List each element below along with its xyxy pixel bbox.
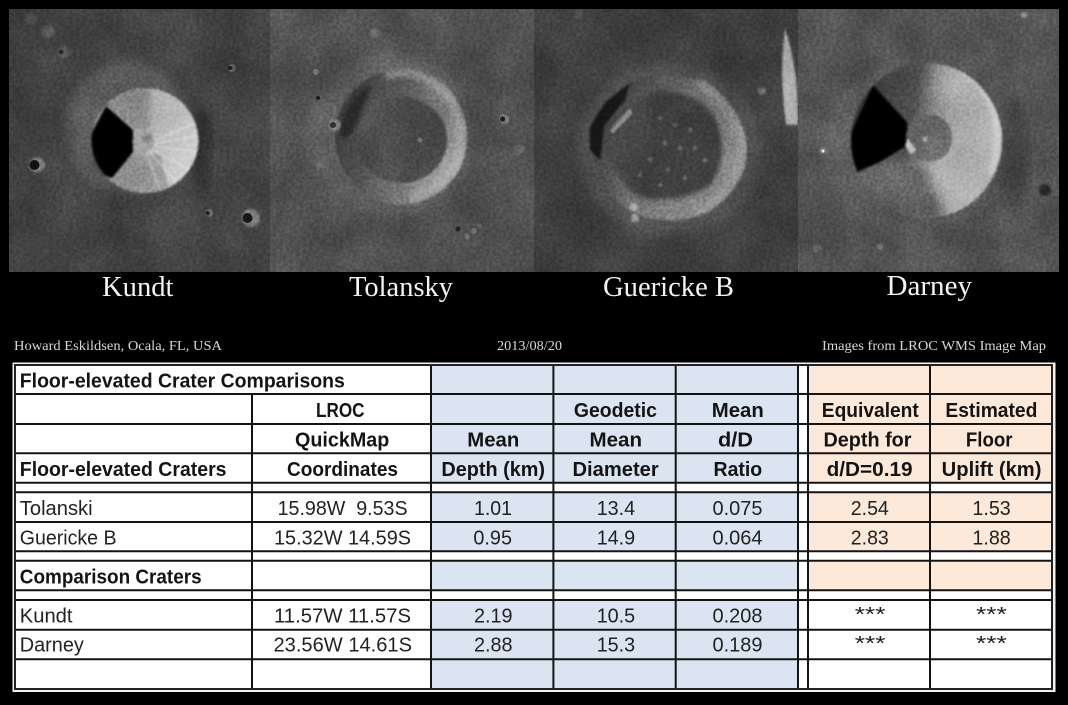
header: geodetic mean diameter	[572, 400, 659, 481]
row: Guericke B: 1.88	[972, 527, 1011, 549]
header: mean d/D ratio	[712, 400, 764, 481]
image: Kundt crater	[9, 9, 270, 272]
image: Darney crater	[798, 9, 1059, 272]
row: Guericke B	[20, 527, 1011, 549]
blue column shading	[431, 366, 798, 688]
row: Kundt: 2.19	[474, 606, 513, 628]
row: Tolanski: 15.98W 9.53S	[278, 498, 408, 520]
heading: comparison craters: Comparison Craters	[20, 566, 202, 588]
label: Guericke B: Guericke B	[603, 272, 734, 303]
row: Kundt: ***	[855, 604, 886, 626]
row: Guericke B: Guericke B	[20, 527, 116, 549]
row: Darney: 15.3	[597, 635, 635, 657]
row: Tolanski: 1.01	[474, 498, 512, 520]
row: Darney	[20, 633, 1007, 657]
label: Darney: Darney	[886, 271, 973, 302]
header: equivalent depth: Depth for	[824, 430, 912, 452]
credit: image source: Images from LROC WMS Image Map	[822, 338, 1046, 353]
row: Tolanski: 0.075	[712, 498, 762, 520]
header: equivalent depth	[822, 400, 919, 481]
icon: lit ridge crater edge	[782, 28, 798, 125]
row: Guericke B: 2.83	[851, 527, 889, 549]
heading: table title: Floor-elevated Crater Comparisons	[20, 370, 345, 392]
header: estimated floor uplift	[942, 400, 1042, 481]
credit: date: 2013/08/20	[497, 338, 562, 353]
row: Guericke B: 0.95	[473, 527, 512, 549]
row: Tolanski	[20, 498, 1011, 520]
row: Guericke B: 14.9	[597, 527, 635, 549]
header: equivalent depth: d/D=0.19	[827, 459, 913, 481]
header: geodetic mean diameter: Diameter	[572, 459, 659, 481]
header: coordinates column: QuickMap	[295, 430, 389, 452]
row: Tolanski: 13.4	[597, 498, 635, 520]
header: estimated floor uplift: Floor	[966, 430, 1013, 452]
row: Kundt: ***	[976, 604, 1007, 626]
header: mean d/D ratio: Mean	[712, 400, 764, 422]
row: Darney: ***	[855, 633, 886, 655]
heading: floor-elevated craters: Floor-elevated Craters	[20, 459, 226, 481]
table grid	[16, 366, 1051, 688]
row: Tolanski: 1.53	[972, 498, 1011, 520]
credit: author: Howard Eskildsen, Ocala, FL, USA	[14, 338, 222, 353]
image: Guericke B crater	[534, 9, 798, 272]
row: Guericke B: 0.064	[712, 527, 762, 549]
header: mean d/D ratio: d/D	[718, 430, 753, 452]
image: Tolansky crater	[270, 9, 534, 272]
header: estimated floor uplift: Estimated	[945, 400, 1037, 422]
header: geodetic mean diameter: Geodetic	[574, 400, 657, 422]
row: Darney: Darney	[20, 635, 84, 657]
header: geodetic mean diameter: Mean	[590, 430, 642, 452]
row: Darney: 2.88	[474, 635, 513, 657]
header: coordinates column: Coordinates	[287, 459, 398, 481]
row: Kundt: Kundt	[20, 606, 73, 628]
header: coordinates column: LROC	[316, 400, 364, 422]
row: Darney: ***	[976, 633, 1007, 655]
header: equivalent depth: Equivalent	[822, 400, 919, 422]
row: Tolanski: Tolanski	[20, 498, 93, 520]
header: mean depth: Depth (km)	[441, 459, 545, 481]
header: mean depth	[441, 430, 545, 481]
header: mean d/D ratio: Ratio	[714, 459, 762, 481]
row: Kundt: 10.5	[597, 606, 635, 628]
header: coordinates column	[287, 400, 398, 481]
row: Kundt: 11.57W 11.57S	[274, 606, 411, 628]
panel: crater images	[9, 9, 1059, 272]
header: mean depth: Mean	[467, 430, 519, 452]
peach column shading	[808, 366, 1051, 590]
row: Tolanski: 2.54	[851, 498, 889, 520]
row: Guericke B: 15.32W 14.59S	[274, 527, 411, 549]
row: Darney: 23.56W 14.61S	[274, 635, 412, 657]
panel: data table	[12, 362, 1056, 692]
label: Tolansky: Tolansky	[349, 272, 454, 303]
label: Kundt: Kundt	[102, 272, 174, 303]
row: Kundt: 0.208	[712, 606, 762, 628]
header: estimated floor uplift: Uplift (km)	[942, 459, 1042, 481]
row: Kundt	[20, 604, 1007, 628]
row: Darney: 0.189	[712, 635, 762, 657]
